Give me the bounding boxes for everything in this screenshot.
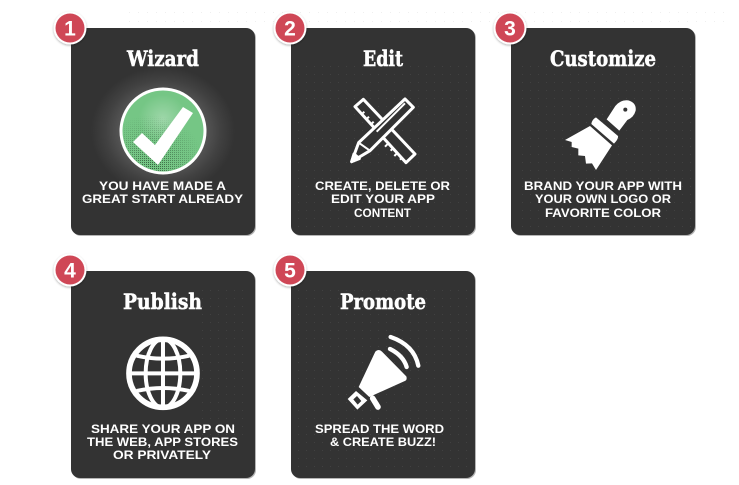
badge: 3: 3 bbox=[504, 18, 516, 40]
description: Customize bbox=[524, 179, 682, 220]
description: Promote: & CREATE BUZZ! bbox=[330, 435, 436, 449]
badge: 4 bbox=[54, 254, 86, 286]
description: Publish: THE WEB, APP STORES bbox=[87, 435, 238, 449]
badge: 2 bbox=[274, 12, 306, 44]
panel: Customize bbox=[511, 28, 696, 236]
panel: Edit bbox=[291, 28, 476, 236]
description: Customize: BRAND YOUR APP WITH bbox=[524, 179, 682, 193]
description: Wizard: GREAT START ALREADY bbox=[82, 192, 243, 206]
description: Wizard: YOU HAVE MADE A bbox=[99, 179, 226, 193]
icon: globe bbox=[129, 339, 197, 408]
description: Wizard bbox=[82, 179, 243, 206]
panel: Promote bbox=[291, 271, 476, 479]
heading: Publish: Publish bbox=[123, 289, 202, 314]
heading: Promote: Promote bbox=[340, 289, 426, 314]
icon: pencil and ruler bbox=[352, 99, 415, 163]
icon: check mark in green circle bbox=[100, 74, 227, 188]
description: Publish: SHARE YOUR APP ON bbox=[91, 422, 235, 436]
description: Edit: CREATE, DELETE OR bbox=[315, 179, 450, 193]
description: Customize: FAVORITE COLOR bbox=[545, 206, 661, 220]
description: Publish: OR PRIVATELY bbox=[113, 448, 211, 462]
description: Publish bbox=[87, 422, 238, 462]
badge: 1 bbox=[54, 12, 86, 44]
description: Promote bbox=[315, 422, 444, 449]
description: Promote: SPREAD THE WORD bbox=[315, 422, 444, 436]
icon: paint brush bbox=[565, 100, 636, 170]
description: Edit: CONTENT bbox=[354, 206, 412, 220]
heading: Edit: Edit bbox=[363, 46, 403, 71]
description: Edit: EDIT YOUR APP bbox=[331, 192, 435, 206]
badge: 5: 5 bbox=[284, 260, 296, 282]
description: Customize: YOUR OWN LOGO OR bbox=[535, 192, 671, 206]
description: Edit bbox=[315, 179, 450, 220]
badge: 5 bbox=[274, 254, 306, 286]
badge: 4: 4 bbox=[64, 260, 76, 282]
panel: Publish bbox=[71, 271, 256, 479]
panel: Wizard bbox=[71, 28, 256, 236]
badge: 2: 2 bbox=[284, 18, 296, 40]
badge: 1: 1 bbox=[64, 18, 76, 40]
heading: Customize: Customize bbox=[550, 46, 656, 71]
badge: 3 bbox=[494, 12, 526, 44]
heading: Wizard: Wizard bbox=[126, 46, 199, 71]
icon: megaphone bbox=[348, 337, 418, 410]
